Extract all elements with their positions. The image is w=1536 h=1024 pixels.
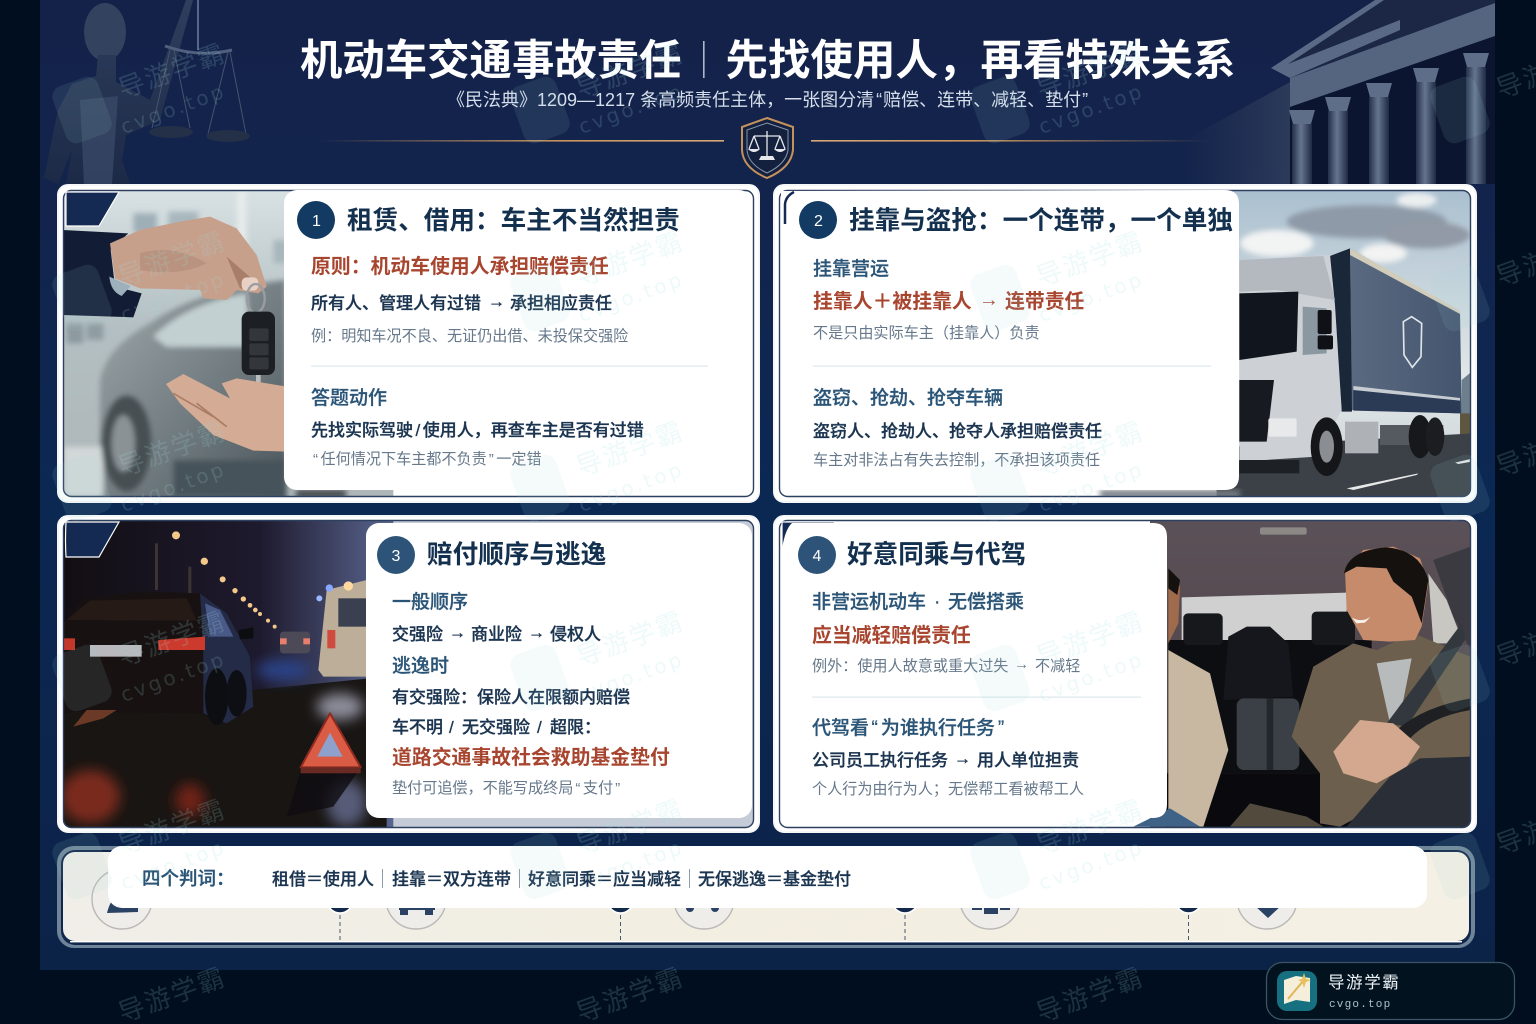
dashboard xyxy=(1347,757,1471,830)
watermark pattern: 导游学霸 xyxy=(572,606,688,672)
key ring xyxy=(247,284,265,313)
section heading: 逃逸时 xyxy=(392,655,449,677)
exception note: → xyxy=(1014,656,1029,673)
section heading: 挂靠营运 xyxy=(813,258,889,280)
section heading: 一般顺序 xyxy=(392,591,468,613)
title: 机动车交通事故责任 xyxy=(300,37,682,84)
key fob xyxy=(242,312,275,375)
photo: night accident scene xyxy=(60,517,756,833)
rear window xyxy=(1182,593,1347,641)
chassis xyxy=(1345,422,1378,453)
panel: card 3 payment order and hit and run xyxy=(58,516,759,833)
watermark pattern: 导游学霸 xyxy=(1032,226,1148,292)
order line: → xyxy=(449,623,466,642)
timeline nodes xyxy=(329,908,1200,914)
watermark pattern: 导游学霸 xyxy=(114,226,230,292)
summary items: 挂靠＝双方连带 xyxy=(392,869,511,889)
red rule: → xyxy=(979,289,999,311)
text panel 1 xyxy=(284,190,752,490)
watermark pattern: cvgo.top xyxy=(1035,267,1147,327)
watermark pattern: 导游学霸 xyxy=(114,38,230,104)
car xyxy=(118,592,252,706)
section heading: · xyxy=(934,592,940,613)
watermark pattern: cvgo.top xyxy=(1035,457,1147,517)
section heading: 非营运机动车 xyxy=(812,592,926,613)
watermark pattern: 导游学霸 xyxy=(114,794,230,860)
action line: 先找实际驾驶/使用人，再查车主是否有过错 xyxy=(311,420,644,440)
corner badge xyxy=(66,522,119,557)
section heading: 代驾看“为谁执行任务” xyxy=(812,717,1004,739)
note: 个人行为由行为人；无偿帮工看被帮工人 xyxy=(812,781,1084,798)
watermark pattern: 导游学霸 xyxy=(1032,416,1148,482)
panel: card 4 goodwill ride and designated driver xyxy=(774,516,1477,833)
body line: 无交强险 xyxy=(462,717,530,737)
example line: 例：明知车况不良、无证仍出借、未投保交强险 xyxy=(311,327,628,345)
backpack xyxy=(1223,627,1293,700)
icon: map with star xyxy=(1277,971,1317,1011)
watermark pattern: 导游学霸 xyxy=(1032,606,1148,672)
section heading: 答题动作 xyxy=(311,387,387,409)
watermark pattern: 导游学霸 xyxy=(114,416,230,482)
watermark pattern: cvgo.top xyxy=(117,79,229,139)
red rule: 连带责任 xyxy=(1005,291,1085,313)
caution line: “任何情况下车主都不负责”一定错 xyxy=(313,451,542,468)
driver hand xyxy=(1333,720,1420,783)
watermark pattern: cvgo.top xyxy=(117,647,229,707)
number badge 2 xyxy=(799,201,837,239)
watermark pattern: cvgo.top xyxy=(117,835,229,895)
timeline dashed connectors xyxy=(340,915,1189,940)
passenger xyxy=(1168,650,1228,827)
heading 1: 租赁、借用：车主不当然担责 xyxy=(347,206,680,235)
exception note: 不减轻 xyxy=(1035,658,1080,675)
jacket xyxy=(62,230,142,317)
driver jacket xyxy=(1292,633,1471,827)
heading 2: 挂靠与盗抢：一个连带，一个单独 xyxy=(849,206,1233,235)
watermark pattern: 导游学霸 xyxy=(572,794,688,860)
watermark pattern: cvgo.top xyxy=(1035,835,1147,895)
watermark pattern: 导游学霸 xyxy=(114,606,230,672)
title: 先找使用人，再看特殊关系 xyxy=(726,38,1236,85)
brand logo card xyxy=(1266,962,1514,1020)
background art: lady justice statue xyxy=(44,0,250,184)
corner badge xyxy=(782,522,835,557)
body line: 承担相应责任 xyxy=(510,294,612,313)
distant car xyxy=(280,632,310,653)
number badge 3: 3 xyxy=(392,548,401,565)
section heading: 无偿搭乘 xyxy=(948,591,1024,613)
body line: → xyxy=(488,292,505,311)
number badge 1 xyxy=(297,201,335,239)
watermark pattern: cvgo.top xyxy=(117,267,229,327)
icon circles xyxy=(92,869,1297,929)
panel: card 2 affiliation and theft xyxy=(774,185,1483,502)
box trailer xyxy=(1350,248,1462,413)
body line: → xyxy=(954,749,971,768)
watermark pattern: 导游学霸 xyxy=(572,226,688,292)
subtitle: 《民法典》1209—1217 条高频责任主体，一张图分清“赔偿、连带、减轻、垫付” xyxy=(447,90,1088,110)
order line: 商业险 xyxy=(471,625,522,644)
order line: 侵权人 xyxy=(550,625,601,644)
watermark pattern: cvgo.top xyxy=(1035,79,1147,139)
body line: 有交强险：保险人在限额内赔偿 xyxy=(392,687,630,707)
body line: 车不明 xyxy=(392,718,443,737)
seats xyxy=(1168,640,1372,773)
divider lines xyxy=(320,140,1211,142)
body line: 所有人、管理人有过错 xyxy=(311,294,481,313)
driver head xyxy=(1345,547,1428,642)
watermark pattern: cvgo.top xyxy=(575,835,687,895)
summary items: 租借＝使用人 xyxy=(272,870,374,889)
corner badge xyxy=(66,192,119,226)
brand name: 导游学霸 xyxy=(1328,973,1400,992)
red rule: 道路交通事故社会救助基金垫付 xyxy=(392,746,670,769)
watermark pattern: cvgo.top xyxy=(575,79,687,139)
ambulance xyxy=(318,580,367,677)
brand url: cvgo.top xyxy=(1329,999,1391,1011)
watermark pattern: cvgo.top xyxy=(575,647,687,707)
watermark pattern: cvgo.top xyxy=(575,457,687,517)
watermark pattern: 导游学霸 xyxy=(1032,794,1148,860)
number badge 4: 4 xyxy=(813,548,822,565)
text panel 2 xyxy=(781,190,1239,490)
number badge 2: 2 xyxy=(814,213,823,230)
body line: / xyxy=(537,718,542,737)
body line: / xyxy=(449,718,454,737)
panel: bottom summary band xyxy=(57,846,1475,948)
watermark pattern: 导游学霸 xyxy=(572,416,688,482)
photo: handing over car key xyxy=(60,187,393,500)
panel: card 1 rental and borrowing xyxy=(58,185,759,502)
summary items: 好意同乘＝应当减轻 xyxy=(528,870,681,889)
section heading: 盗窃、抢劫、抢夺车辆 xyxy=(813,387,1003,409)
warning triangle xyxy=(301,713,361,767)
watermark pattern: cvgo.top xyxy=(117,457,229,517)
summary white bar xyxy=(108,846,1427,908)
text panel 4 xyxy=(781,523,1167,818)
cab xyxy=(1239,255,1342,462)
body line: 用人单位担责 xyxy=(977,750,1079,770)
red rule: 挂靠人＋被挂靠人 xyxy=(813,291,972,313)
lower hand xyxy=(166,374,287,452)
watermark pattern: cvgo.top xyxy=(575,267,687,327)
summary label: 四个判词： xyxy=(142,868,235,889)
photo: inside car with driver xyxy=(1133,517,1477,833)
corner badge arc xyxy=(785,192,794,224)
summary items: 无保逃逸＝基金垫付 xyxy=(698,869,851,889)
heading 4: 好意同乘与代驾 xyxy=(847,540,1026,569)
background art: courthouse xyxy=(1224,0,1495,184)
watermark pattern: 导游学霸 xyxy=(572,38,688,104)
watermark pattern: 导游学霸 xyxy=(1032,38,1148,104)
note: 不是只由实际车主（挂靠人）负责 xyxy=(813,325,1040,342)
watermark pattern: cvgo.top xyxy=(1035,647,1147,707)
note: 垫付可追偿，不能写成终局“支付” xyxy=(392,780,620,797)
icon: scales shield emblem xyxy=(742,118,793,178)
summary items xyxy=(272,869,851,889)
body line: 超限： xyxy=(550,718,601,737)
icons peeking out xyxy=(107,895,1282,918)
red rule: 应当减轻赔偿责任 xyxy=(812,624,971,647)
note: 车主对非法占有失去控制，不承担该项责任 xyxy=(813,452,1100,469)
heading 3: 赔付顺序与逃逸 xyxy=(427,540,606,569)
order line: 交强险 xyxy=(392,625,443,644)
number badge 3 xyxy=(377,536,415,574)
body line: 盗窃人、抢劫人、抢夺人承担赔偿责任 xyxy=(813,422,1102,441)
body line: 公司员工执行任务 xyxy=(812,751,948,770)
number badge 4 xyxy=(798,536,836,574)
photo: semi truck on highway xyxy=(1100,187,1483,500)
cab pillar xyxy=(1330,248,1352,412)
text panel 3 xyxy=(366,523,752,818)
title xyxy=(300,37,1236,85)
upper hand xyxy=(110,217,267,300)
street lights xyxy=(172,531,277,629)
exception note: 例外：使用人故意或重大过失 xyxy=(812,658,1008,675)
red principle: 原则：机动车使用人承担赔偿责任 xyxy=(311,255,609,278)
suitcase xyxy=(1237,698,1299,770)
number badge 1: 1 xyxy=(312,213,321,230)
steering wheel xyxy=(1397,698,1471,740)
wet road xyxy=(60,677,387,833)
order line: → xyxy=(528,623,545,642)
column group xyxy=(1292,124,1312,184)
